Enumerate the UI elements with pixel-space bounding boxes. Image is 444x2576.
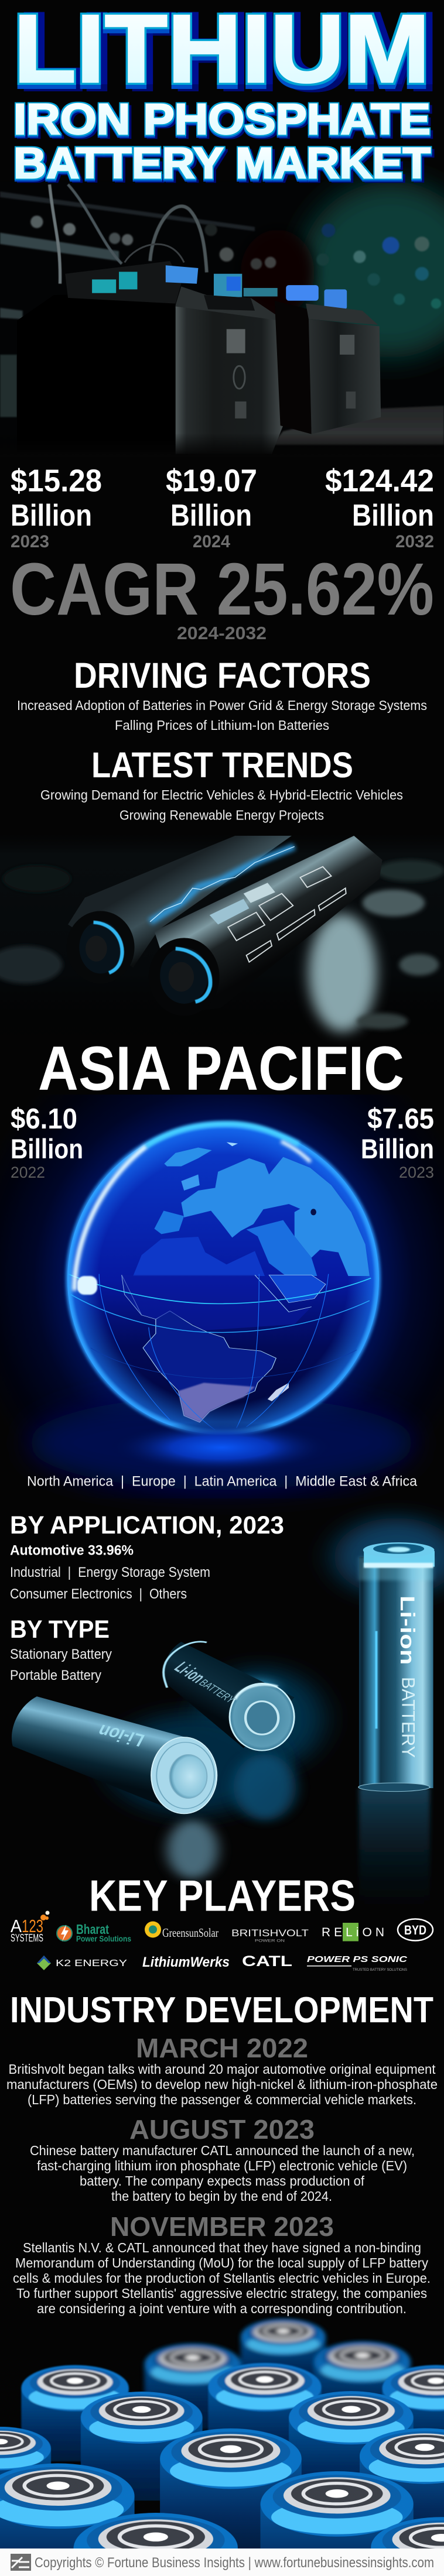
- logo: BYD: BYD: [404, 1923, 426, 1937]
- title: [13, 0, 431, 187]
- value 2023 region: Billion: [361, 1133, 434, 1164]
- value 2023 region: 2023: [399, 1164, 434, 1181]
- globe latitude and meridian lines: [68, 1274, 371, 1430]
- logo: A123 Systems: A: [11, 1916, 22, 1936]
- by type: BY TYPE: [10, 1615, 110, 1644]
- development: March 2022: MARCH 2022: [136, 2033, 308, 2063]
- bottom fade of first photo: [0, 433, 444, 457]
- CAGR: 2024-2032: [177, 623, 267, 643]
- value 2023: $15.28: [11, 464, 102, 499]
- logo: Greensun Solar: [145, 1921, 218, 1940]
- logo: Britishvolt: [231, 1927, 309, 1943]
- by application: Automotive 33.96%: [10, 1543, 134, 1558]
- logo: RELiON: RELiON: [322, 1926, 384, 1939]
- logo: BYD: [398, 1919, 433, 1941]
- logo: A123 Systems: [11, 1910, 49, 1944]
- title: IRON PHOSPHATE: [13, 95, 431, 143]
- Li-ion label on tall battery: [396, 1596, 418, 1758]
- icon: Fortune Business Insights logo: [11, 2554, 31, 2571]
- lower-left battery: Li-ion: [94, 1721, 148, 1751]
- development: August 2023: [30, 2114, 415, 2204]
- logo: Power Sonic: TRUSTED BATTERY SOLUTIONS: [353, 1968, 407, 1972]
- development: August 2023: AUGUST 2023: [129, 2114, 315, 2145]
- by application: Industrial | Energy Storage System: [10, 1565, 210, 1580]
- by type: Stationary Battery: [10, 1647, 112, 1662]
- reflections: [234, 1754, 296, 1820]
- value 2024: 2024: [193, 532, 230, 551]
- development: November 2023: cells & modules for the production of Stellantis electric vehicles in Europe.: [13, 2270, 431, 2286]
- value 2032: 2032: [395, 532, 434, 551]
- logo: Power Sonic: [307, 1954, 408, 1972]
- middle battery: BATTERY: [196, 1678, 238, 1705]
- driving factors: Increased Adoption of Batteries in Power Grid & Energy Storage Systems: [17, 698, 427, 713]
- logo: CATL: CATL: [242, 1953, 292, 1970]
- logo: Bharat Power Solutions: Power Solutions: [76, 1934, 131, 1943]
- development: March 2022: [6, 2033, 438, 2107]
- photo: battery cells array: [0, 2318, 444, 2576]
- development: November 2023: Memorandum of Understanding (MoU) for the local supply of LFP battery: [15, 2255, 428, 2270]
- value 2022: 2022: [11, 1164, 45, 1181]
- development: August 2023: the battery to begin by the end of 2024.: [111, 2189, 332, 2204]
- development: March 2022: Britishvolt began talks with around 20 major automotive original equipment: [8, 2062, 436, 2077]
- logo: Greensun Solar: GreensunSolar: [162, 1926, 218, 1940]
- value 2024: Billion: [170, 499, 252, 533]
- value 2023: [11, 464, 102, 551]
- latest trends: [40, 745, 403, 823]
- driving factors: Falling Prices of Lithium-Ion Batteries: [115, 718, 329, 733]
- value 2032: $124.42: [325, 464, 434, 499]
- development: August 2023: fast-charging lithium iron phosphate (LFP) electronic vehicle (EV): [37, 2158, 407, 2173]
- title: BATTERY MARKET: [13, 139, 431, 187]
- value 2032: [325, 464, 434, 551]
- logo: Britishvolt: BRITISHVOLT: [231, 1927, 309, 1939]
- regions list: North America | Europe | Latin America | Middle East & Africa: [27, 1474, 417, 1489]
- value 2024: [166, 464, 257, 551]
- globe backdrop glow: [0, 1095, 444, 1498]
- footer: [0, 2548, 444, 2576]
- by application: Consumer Electronics | Others: [10, 1586, 187, 1602]
- by application: BY APPLICATION, 2023: [10, 1511, 284, 1539]
- middle battery: Li-ion: [170, 1659, 210, 1686]
- development: November 2023: To further support Stellantis' aggressive electric strategy, the companies: [16, 2286, 427, 2301]
- Li-ion label on tall battery: BATTERY: [398, 1677, 418, 1758]
- development: March 2022: (LFP) batteries serving the passenger & commercial vehicle markets.: [28, 2092, 416, 2107]
- logo: Bharat Power Solutions: Bharat: [76, 1922, 109, 1937]
- logo: Bharat Power Solutions: [57, 1922, 131, 1943]
- value 2023 region: $7.65: [367, 1103, 434, 1135]
- logo: K2 Energy: [37, 1956, 127, 1970]
- value 2022: [11, 1103, 83, 1181]
- lower-left battery: [12, 1696, 217, 1814]
- value 2022: Billion: [11, 1133, 83, 1164]
- latest trends: Growing Demand for Electric Vehicles & Hybrid-Electric Vehicles: [40, 787, 403, 802]
- by application: [10, 1511, 284, 1602]
- latest trends: LATEST TRENDS: [91, 745, 353, 785]
- photo: cylindrical batteries with lightning: [0, 833, 444, 1048]
- development: August 2023: battery. The company expects mass production of: [80, 2173, 365, 2189]
- lands lower hemisphere: [68, 1274, 371, 1430]
- value 2023 region: [361, 1103, 434, 1181]
- logo: A123 Systems: 123: [22, 1916, 43, 1936]
- value 2023: Billion: [11, 499, 92, 533]
- logo: Britishvolt: POWER ON: [255, 1940, 285, 1943]
- lands upper hemisphere: [133, 1142, 370, 1276]
- development: November 2023: Stellantis N.V. & CATL announced that they have signed a non-binding: [23, 2240, 421, 2255]
- globe sphere: [67, 1123, 379, 1435]
- development: August 2023: Chinese battery manufacturer CATL announced the launch of a new,: [30, 2143, 415, 2158]
- globe rim highlights: [68, 1124, 378, 1434]
- photo: li-ion batteries: [12, 1518, 444, 1913]
- logo: K2 Energy: K2 ENERGY: [56, 1958, 127, 1968]
- value 2024: $19.07: [166, 464, 257, 499]
- Li-ion label on tall battery: Li-ion: [396, 1596, 418, 1665]
- latest trends: Growing Renewable Energy Projects: [119, 808, 324, 823]
- logo: A123 Systems: SYSTEMS: [11, 1932, 43, 1944]
- driving factors: [17, 656, 427, 733]
- value 2022: $6.10: [11, 1103, 77, 1135]
- middle battery: [163, 1642, 295, 1751]
- photo: battery packs: [0, 181, 444, 454]
- Asia Pacific heading: ASIA PACIFIC: [38, 1033, 404, 1103]
- development: March 2022: manufacturers (OEMs) to develop new high-nickel & lithium-iron-phosphate: [6, 2077, 438, 2092]
- key players heading: KEY PLAYERS: [89, 1871, 356, 1920]
- value 2032: Billion: [352, 499, 434, 533]
- logo: LithiumWerks: LithiumWerks: [142, 1954, 230, 1970]
- glow beneath globe: [110, 1422, 333, 1473]
- development: November 2023: [13, 2211, 431, 2316]
- logo: Power Sonic: POWER PS SONIC: [307, 1954, 408, 1964]
- by type: [10, 1615, 112, 1683]
- wide ground glow: [28, 1396, 415, 1490]
- tall battery reflection: [359, 1788, 430, 1913]
- driving factors: DRIVING FACTORS: [74, 656, 371, 695]
- market values: [11, 464, 434, 551]
- by type: Portable Battery: [10, 1668, 101, 1683]
- tall battery: [358, 1542, 435, 1792]
- value 2023: 2023: [11, 532, 49, 551]
- development: November 2023: NOVEMBER 2023: [110, 2211, 334, 2242]
- globe: [67, 1123, 379, 1435]
- development: November 2023: are considering a joint venture with a corresponding contribution.: [37, 2301, 407, 2316]
- key player logos: [11, 1910, 433, 1972]
